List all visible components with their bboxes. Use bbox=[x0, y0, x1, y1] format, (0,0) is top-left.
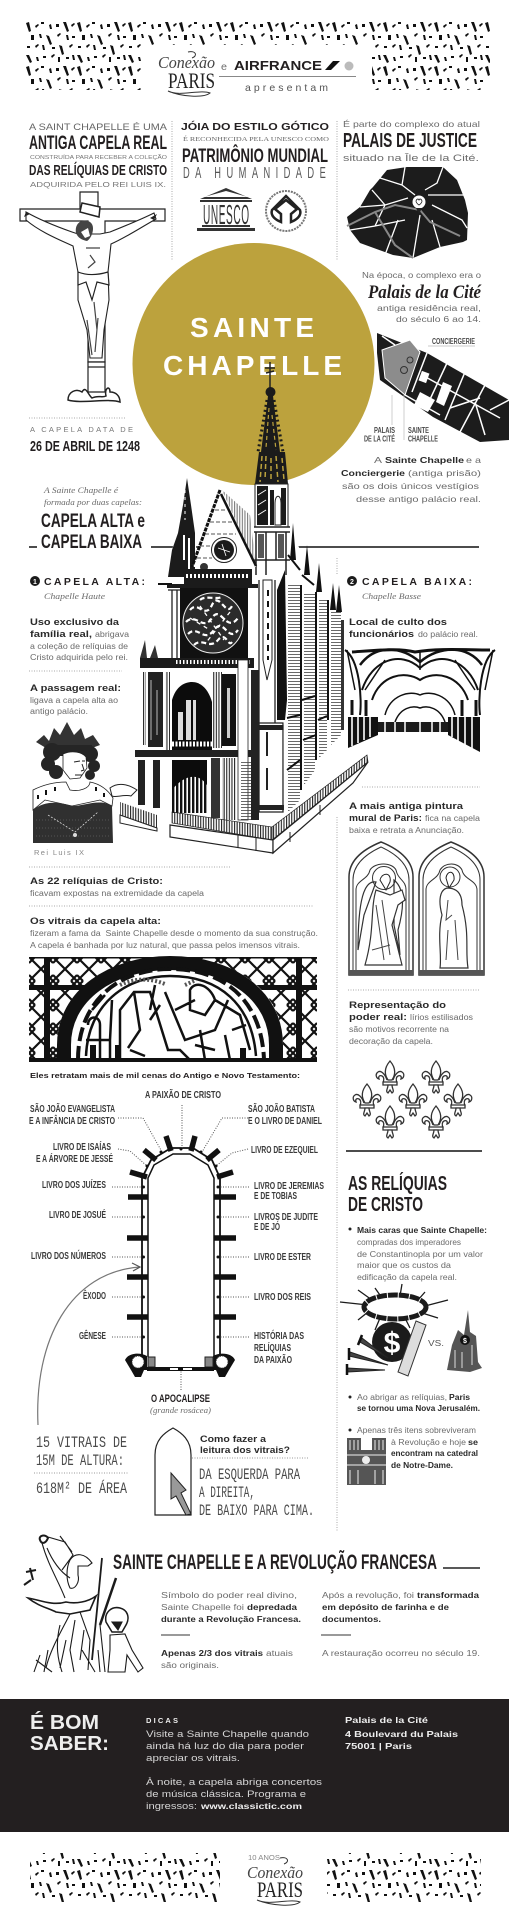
top pattern band bbox=[25, 20, 490, 90]
icon: fleur-de-lis group bbox=[353, 1061, 472, 1138]
illustration: Liberty leading the people bbox=[24, 1536, 143, 1672]
corner pier bbox=[254, 580, 286, 812]
illustration: Sainte Chapelle building bbox=[120, 362, 372, 856]
plan labels: RELÍQUIAS bbox=[254, 1341, 291, 1354]
plan labels: E A ÁRVORE DE JESSÉ bbox=[36, 1152, 113, 1165]
robe bbox=[33, 802, 113, 843]
vs label: VS. bbox=[428, 1339, 444, 1348]
bullet text 1: de Constantinopla por um valor bbox=[357, 1250, 483, 1259]
map label: palais de la cite bbox=[364, 426, 395, 444]
panel: joia do estilo gotico: É RECONHECIDA PELA UNESCO COMO bbox=[183, 135, 330, 143]
hand bbox=[110, 784, 137, 797]
text: como fazer a leitura: Como fazer a bbox=[200, 1434, 267, 1445]
panel: capela alta: a coleção de relíquias de bbox=[30, 642, 129, 651]
column right: documentos. bbox=[322, 1615, 381, 1624]
stat: 15 vitrais bbox=[34, 1434, 129, 1498]
gold title circle bbox=[132, 243, 374, 485]
column left: atuais bbox=[266, 1649, 293, 1658]
text: vestigios: Conciergerie bbox=[341, 468, 405, 478]
bullet text 1: compradas dos imperadores bbox=[357, 1238, 461, 1247]
bullet text 3: se bbox=[468, 1438, 479, 1447]
text: capela data: A CAPELA DATA DE bbox=[30, 425, 133, 434]
map label: sainte chapelle bbox=[408, 426, 438, 444]
presenting line: apresentam bbox=[245, 82, 328, 94]
icon: window arch with arrow bbox=[155, 1428, 191, 1515]
text: 22 reliquias bbox=[29, 867, 314, 906]
heading bbox=[348, 1172, 447, 1216]
text: poder real: Representação do bbox=[349, 1000, 446, 1011]
face bbox=[63, 752, 87, 779]
panel: capela alta: família real, bbox=[30, 629, 92, 640]
heading: capela alta e capela baixa bbox=[41, 485, 145, 553]
panel: joia do estilo gotico: PATRIMÔNIO MUNDIAL bbox=[182, 143, 328, 167]
logo: 10 anos Conexão Paris: PARIS bbox=[257, 1877, 303, 1902]
tips: ainda há luz do dia para poder bbox=[146, 1741, 304, 1751]
text: como fazer a leitura: DE BAIXO PARA CIMA. bbox=[199, 1502, 314, 1520]
side wall buttresses bbox=[277, 523, 345, 815]
text: vitrais: Os vitrais da capela alta: bbox=[30, 916, 161, 927]
title: SAINTE bbox=[190, 312, 314, 343]
column right bbox=[321, 1591, 480, 1658]
column right: Após a revolução, foi bbox=[322, 1591, 414, 1600]
tips: apreciar os vitrais. bbox=[146, 1753, 240, 1763]
text: como fazer a leitura: DA ESQUERDA PARA bbox=[199, 1466, 300, 1484]
illustration: annunciation virgin panel bbox=[419, 842, 484, 975]
panel: capela baixa bbox=[347, 576, 478, 640]
ermine collar bbox=[33, 782, 113, 810]
panel: capela alta: antigo palácio. bbox=[30, 707, 88, 716]
panel: joia do estilo gotico: JÓIA DO ESTILO GÓTICO bbox=[181, 120, 329, 133]
column left: Símbolo do poder real divino, bbox=[161, 1591, 297, 1600]
map label: sainte chapelle: SAINTE bbox=[408, 426, 429, 435]
panel: capela baixa: CAPELA BAIXA: bbox=[362, 576, 472, 588]
text: cenas: Eles retratam mais de mil cenas do Antigo e Novo Testamento: bbox=[30, 1071, 300, 1080]
panel: antiga capela real: DAS RELÍQUIAS DE CRISTO bbox=[29, 162, 167, 179]
text: poder real: são motivos recorrente na bbox=[349, 1025, 450, 1034]
text: palais de la cite: do século 6 ao 14. bbox=[396, 315, 481, 324]
bottom pattern right bbox=[327, 1853, 481, 1902]
text: poder real: lírios estilisados bbox=[410, 1013, 473, 1022]
bullet text 2: Paris bbox=[449, 1393, 471, 1402]
plan labels: (grande rosácea) bbox=[150, 1406, 211, 1415]
hair bbox=[41, 743, 100, 780]
plan walls bbox=[125, 1136, 236, 1377]
panel: as reliquias de cristo bbox=[340, 1151, 487, 1485]
arrow: curved pointer to window bbox=[38, 1263, 140, 1425]
text: poder real: decoração da capela. bbox=[349, 1037, 433, 1046]
caption: rei luis ix: Rei Luis IX bbox=[34, 848, 84, 857]
section rule bbox=[29, 546, 479, 548]
stat: 15 vitrais: 618M² DE ÁREA bbox=[36, 1479, 127, 1498]
text: palais de la cite bbox=[362, 271, 482, 324]
gable bbox=[192, 488, 256, 571]
heading: DE CRISTO bbox=[348, 1194, 423, 1216]
bullet text 3: Apenas três itens sobreviveram bbox=[357, 1426, 476, 1435]
icon: UNESCO temple: UNESCO bbox=[203, 200, 249, 231]
bullet text 1: Mais caras que Sainte Chapelle: bbox=[357, 1226, 487, 1235]
bullet text 2 bbox=[348, 1393, 480, 1413]
plan labels: SÃO JOÃO EVANGELISTA bbox=[30, 1102, 115, 1115]
column left: são originais. bbox=[161, 1661, 219, 1670]
column left: Apenas 2/3 dos vitrais bbox=[161, 1649, 264, 1658]
panel: capela baixa: Local de culto dos bbox=[349, 617, 447, 628]
text: vestigios: são os dois únicos vestígios bbox=[342, 481, 479, 491]
bullet text 3 bbox=[348, 1426, 479, 1470]
heading: capela alta e capela baixa: CAPELA BAIXA bbox=[41, 532, 142, 553]
panel: capela alta: abrigava bbox=[95, 630, 130, 639]
icon: nails bbox=[347, 1335, 388, 1375]
text: pintura mural bbox=[349, 787, 481, 835]
text: pintura mural: A mais antiga pintura bbox=[349, 801, 464, 812]
map: ile de la cite bbox=[364, 333, 509, 444]
heading: capela alta e capela baixa: CAPELA ALTA e bbox=[41, 511, 145, 532]
heading: AS RELÍQUIAS bbox=[348, 1172, 447, 1195]
text: capela data bbox=[29, 418, 140, 455]
icon: dollar coin bbox=[372, 1322, 412, 1362]
plan labels: LIVRO DOS REIS bbox=[254, 1292, 311, 1303]
panel: revolucao francesa bbox=[113, 1551, 480, 1670]
map label: palais de la cite: DE LA CITÉ bbox=[364, 434, 395, 444]
plan labels: LIVRO DOS NÚMEROS bbox=[31, 1249, 106, 1262]
column left: durante a Revolução Francesa. bbox=[161, 1615, 301, 1624]
text: como fazer a leitura: A DIREITA, bbox=[199, 1484, 255, 1502]
icon: wooden plank bbox=[398, 1321, 426, 1376]
sponsor: Air France: e bbox=[221, 62, 227, 73]
spire bbox=[254, 362, 290, 575]
icon: Notre-Dame bbox=[347, 1438, 386, 1485]
panel: capela alta bbox=[29, 576, 145, 716]
text: poder real bbox=[348, 990, 480, 1046]
plan labels: SÃO JOÃO BATISTA bbox=[248, 1102, 315, 1115]
plan labels: E A INFÂNCIA DE CRISTO bbox=[29, 1114, 115, 1127]
crown bbox=[36, 722, 100, 748]
heading: capela alta e capela baixa: formada por duas capelas: bbox=[44, 497, 142, 507]
plan labels: LIVRO DE ESTER bbox=[254, 1252, 312, 1263]
text: poder real: poder real: bbox=[349, 1012, 407, 1023]
text: vestigios: (antiga prisão) bbox=[408, 468, 481, 478]
stat: 15 vitrais: 15 VITRAIS DE bbox=[36, 1434, 127, 1452]
chapel silhouette bbox=[120, 478, 372, 856]
text: vitrais: fizeram a fama da Sainte Chapelle desde o momento da sua construção. bbox=[30, 929, 318, 938]
map label: sainte chapelle: CHAPELLE bbox=[408, 434, 438, 444]
icon: dollar coin: $ bbox=[384, 1327, 401, 1360]
bullet text 3: encontram na catedral bbox=[391, 1449, 478, 1458]
text: pintura mural: mural de Paris: bbox=[349, 813, 422, 824]
column right: transformada bbox=[417, 1591, 480, 1600]
panel: palais de justice bbox=[343, 119, 480, 258]
chart: floor plan of windows bbox=[29, 1088, 324, 1415]
tips: ingressos: bbox=[146, 1801, 197, 1811]
plan labels: LIVRO DE EZEQUIEL bbox=[251, 1145, 318, 1156]
plan labels: GÊNESE bbox=[79, 1329, 106, 1342]
left turret bbox=[168, 478, 195, 577]
bullet text 1: edificação da capela real. bbox=[357, 1273, 457, 1282]
plan labels: LIVRO DE ISAÍAS bbox=[53, 1140, 111, 1153]
logo: Conexão Paris bbox=[158, 52, 215, 96]
logo: Conexão Paris: PARIS bbox=[168, 68, 215, 93]
illustration: stained glass bbox=[29, 957, 317, 1062]
plan labels: LIVRO DE JOSUÉ bbox=[49, 1208, 106, 1221]
panel: capela alta: Cristo adquirida pelo rei. bbox=[30, 653, 128, 662]
text: pintura mural: baixa e retrata a Anunciação. bbox=[349, 826, 464, 835]
text: como fazer a leitura bbox=[192, 1434, 314, 1520]
bullet text 1 bbox=[348, 1226, 487, 1282]
panel: antiga capela real: ADQUIRIDA PELO REI LUIS IX. bbox=[30, 180, 166, 189]
logo: 10 anos Conexão Paris: 10 ANOS bbox=[248, 1855, 280, 1862]
heading: SABER: bbox=[30, 1733, 109, 1755]
text: capela data: 26 DE ABRIL DE 1248 bbox=[30, 438, 140, 455]
tips: Visite a Sainte Chapelle quando bbox=[146, 1729, 309, 1739]
plan labels: E DE JÓ bbox=[254, 1220, 280, 1233]
address: Palais de la Cité bbox=[345, 1715, 428, 1725]
panel: antiga capela real: ANTIGA CAPELA REAL bbox=[29, 133, 167, 154]
text: 22 reliquias: ficavam expostas na extremidade da capela bbox=[30, 889, 205, 898]
text: pintura mural: fica na capela bbox=[425, 814, 481, 823]
icon: crucifix bbox=[20, 192, 165, 402]
address: 75001 | Paris bbox=[345, 1741, 412, 1751]
plan labels bbox=[29, 1088, 324, 1415]
text: palais de la cite: Palais de la Cité bbox=[367, 282, 481, 303]
map label: conciergerie: CONCIERGERIE bbox=[432, 337, 475, 346]
panel: capela alta: ligava a capela alta ao bbox=[30, 696, 119, 705]
panel: capela alta: Chapelle Haute bbox=[44, 591, 105, 601]
heading: É BOM bbox=[30, 1711, 99, 1734]
rose window bbox=[168, 588, 248, 660]
text: palais de la cite: antiga residência real, bbox=[377, 304, 481, 313]
panel: palais de justice: situado na Île de la Cité. bbox=[343, 153, 479, 163]
plan leader lines and dots bbox=[112, 1105, 250, 1390]
plan labels: LIVROS DE JUDITE bbox=[254, 1212, 318, 1223]
panel: antiga capela real: A SAINT CHAPELLE É UMA bbox=[29, 122, 168, 133]
map: Paris bbox=[347, 167, 468, 258]
bullet text 3: de Notre-Dame. bbox=[391, 1461, 453, 1470]
text: vitrais bbox=[30, 916, 318, 950]
bullet text 2: se tornou uma Nova Jerusalém. bbox=[357, 1404, 480, 1413]
column right: em depósito de farinha e de bbox=[322, 1603, 450, 1612]
panel: capela baixa: do palácio real. bbox=[418, 630, 478, 639]
text: 22 reliquias: As 22 relíquias de Cristo: bbox=[30, 876, 163, 887]
address bbox=[345, 1715, 458, 1751]
plan labels: LIVRO DOS JUÍZES bbox=[42, 1178, 106, 1191]
logo: 10 anos Conexão Paris bbox=[247, 1855, 303, 1905]
header logos bbox=[158, 52, 356, 96]
balustrade band bbox=[140, 658, 254, 668]
icon: mini chapel: $ bbox=[463, 1338, 467, 1345]
panel: antiga capela real bbox=[29, 122, 168, 189]
illustration: annunciation angel panel bbox=[349, 842, 413, 975]
column left: Sainte Chapelle foi bbox=[161, 1603, 244, 1612]
text: vestigios: Sainte Chapelle bbox=[385, 455, 464, 465]
plan labels: E DE TOBIAS bbox=[254, 1191, 297, 1202]
vertical dotted dividers bbox=[172, 121, 337, 1531]
text: vestigios bbox=[341, 455, 481, 504]
panel: joia do estilo gotico bbox=[181, 120, 330, 231]
panel: e bom saber bbox=[0, 1699, 509, 1832]
bullet text 3: à Revolução e hoje bbox=[391, 1438, 467, 1447]
text: vestigios: e a bbox=[466, 455, 481, 465]
bullet text 2: Ao abrigar as relíquias, bbox=[357, 1393, 447, 1402]
tips: de música clássica. Programa e bbox=[146, 1789, 306, 1799]
icon: UNESCO temple bbox=[197, 188, 255, 231]
column right: A restauração ocorreu no século 19. bbox=[322, 1649, 480, 1658]
stat: 15 vitrais: 15M DE ALTURA: bbox=[36, 1452, 124, 1470]
address: 4 Boulevard du Palais bbox=[345, 1729, 458, 1739]
illustration: Rei Luis IX portrait bbox=[33, 722, 137, 843]
number badge 1: 1 bbox=[33, 579, 37, 586]
icon: crown of thorns bbox=[340, 1284, 448, 1330]
heading: capela alta e capela baixa: A Sainte Chapelle é bbox=[43, 485, 119, 495]
tips: www.classictic.com bbox=[200, 1801, 303, 1811]
plan labels: O APOCALIPSE bbox=[151, 1393, 210, 1405]
plan labels: LIVRO DE JEREMIAS bbox=[254, 1181, 324, 1192]
front lower facade bbox=[135, 660, 272, 825]
plan labels: E O LIVRO DE DANIEL bbox=[248, 1116, 322, 1127]
number badge 2: 2 bbox=[350, 579, 354, 586]
panel: antiga capela real: CONSTRUÍDA PARA RECEBER A COLEÇÃO bbox=[30, 154, 168, 161]
panel: capela baixa: funcionários bbox=[349, 629, 414, 640]
panel: palais de justice: É parte do complexo do atual bbox=[343, 119, 480, 129]
panel: joia do estilo gotico: DA HUMANIDADE bbox=[183, 163, 326, 182]
column left bbox=[161, 1591, 301, 1670]
column left: depredada bbox=[247, 1603, 298, 1612]
sponsor: Air France: AIRFRANCE bbox=[234, 58, 322, 73]
illustration: lower chapel vaults bbox=[345, 650, 495, 752]
text: vestigios: desse antigo palácio real. bbox=[356, 494, 481, 504]
title bbox=[163, 312, 342, 381]
text: vitrais: A capela é banhada por luz natural, que passa pelos imensos vitrais. bbox=[30, 941, 300, 950]
heading bbox=[30, 1711, 109, 1755]
logo: 10 anos Conexão Paris: Conexão bbox=[247, 1863, 303, 1882]
plan labels: A PAIXÃO DE CRISTO bbox=[145, 1088, 221, 1101]
bottom pattern left bbox=[30, 1853, 220, 1902]
panel: capela alta: A passagem real: bbox=[30, 683, 121, 694]
fences and plinth bbox=[120, 755, 368, 853]
upper cornice bbox=[184, 569, 252, 584]
panel: capela alta: Uso exclusivo da bbox=[30, 617, 120, 628]
sponsor: Air France bbox=[221, 58, 354, 73]
panel: capela baixa: Chapelle Basse bbox=[362, 591, 421, 601]
title: CHAPELLE bbox=[163, 350, 342, 381]
plan labels: DA PAIXÃO bbox=[254, 1353, 292, 1366]
tips bbox=[146, 1716, 323, 1811]
tips: À noite, a capela abriga concertos bbox=[146, 1777, 323, 1787]
text: como fazer a leitura: leitura dos vitrais? bbox=[200, 1445, 290, 1456]
text: vestigios: A bbox=[374, 455, 382, 465]
plan labels: HISTÓRIA DAS bbox=[254, 1329, 304, 1342]
map label: palais de la cite: PALAIS bbox=[374, 426, 395, 435]
tips: DICAS bbox=[146, 1716, 178, 1725]
plan labels: ÊXODO bbox=[83, 1289, 106, 1302]
text: palais de la cite: Na época, o complexo era o bbox=[362, 271, 482, 280]
panel: capela alta: CAPELA ALTA: bbox=[44, 576, 145, 588]
logo: Conexão Paris: Conexão bbox=[158, 53, 215, 72]
icon: world heritage emblem bbox=[266, 191, 306, 231]
icon: mini chapel bbox=[447, 1310, 482, 1372]
bullet text 1: maior que os custos da bbox=[357, 1261, 452, 1270]
